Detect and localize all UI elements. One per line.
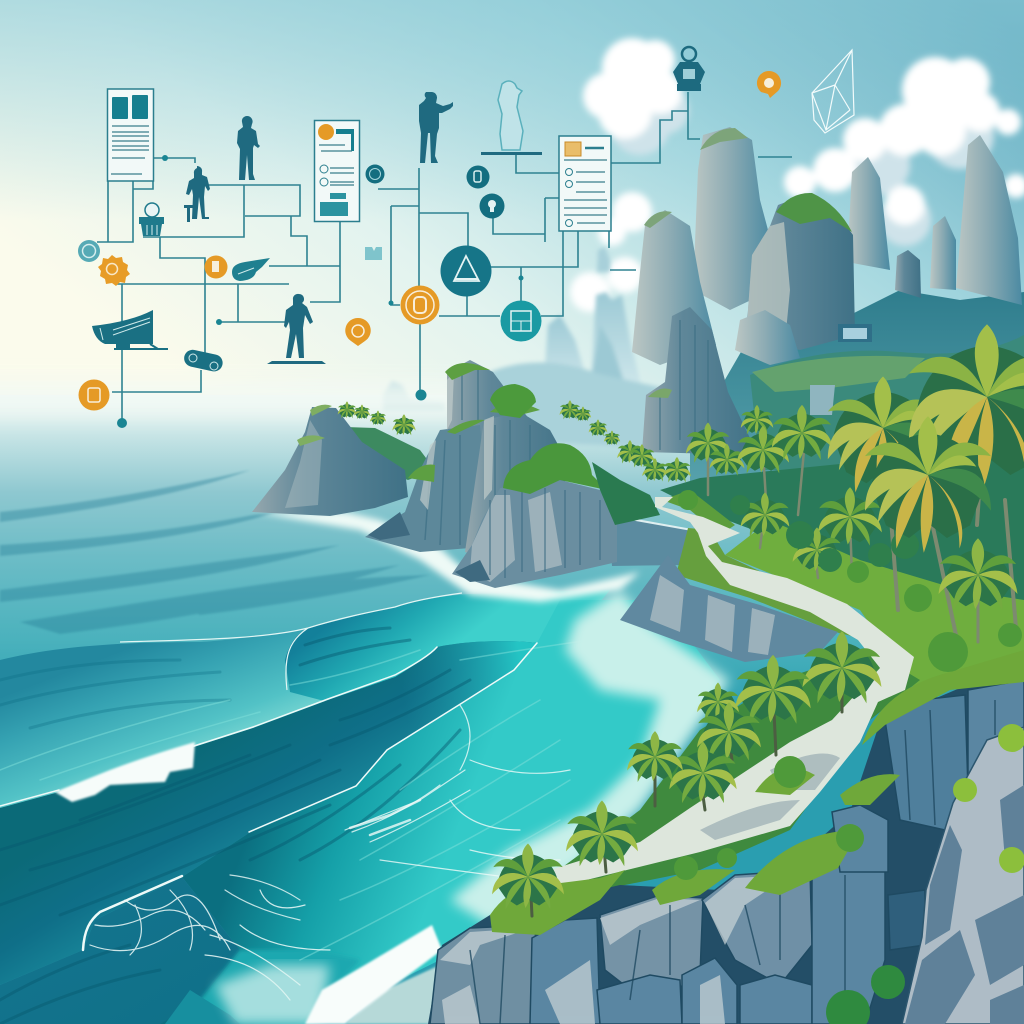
icon: robot [673, 47, 705, 91]
icon: teal controller [183, 348, 224, 373]
far left island rock [252, 407, 408, 516]
icon: bucket globe [139, 203, 164, 236]
rock tower: large green topped [745, 193, 855, 350]
main foam crest [55, 742, 195, 802]
far ledge moss [648, 389, 672, 398]
icon: triangle node [440, 246, 492, 296]
palm trunks [530, 400, 1016, 916]
rocky shoreline [620, 555, 838, 662]
icon: orange pin small [345, 318, 371, 346]
figure: man with stool [184, 166, 210, 222]
far left island face and caps [285, 420, 322, 508]
wave: bottom-left water [0, 877, 240, 1024]
sea wall top [608, 515, 692, 530]
sky top tint [0, 0, 1024, 220]
headland tree [490, 384, 536, 418]
icon: teal leaf shape [232, 258, 270, 281]
icon: dark teal ring [366, 164, 384, 184]
dark ripples upper [0, 660, 230, 728]
rocky shoreline faces [650, 575, 775, 655]
icon: open book [365, 247, 382, 260]
boulder cracks [470, 700, 995, 1024]
rock tower: tall central [693, 127, 772, 310]
wave: shore water [160, 600, 720, 1024]
grass lawn [725, 520, 1024, 690]
main path [550, 497, 914, 886]
sea wall [608, 515, 692, 566]
rock tower: front blue [642, 307, 758, 455]
foam lines [0, 643, 570, 1000]
central front rock strata [490, 488, 600, 578]
central headland back rock [447, 360, 570, 520]
cliff tufts [953, 724, 1024, 873]
foreground right cliff shadows [905, 785, 1024, 1024]
light ripples [0, 640, 590, 960]
grass strip by road [662, 490, 735, 535]
rock tower: far right spire [956, 135, 1022, 305]
central headland second rock [465, 412, 572, 560]
large palms right grove [828, 324, 1024, 610]
foreground right cliff [902, 727, 1024, 1024]
central headland canopy [503, 443, 607, 494]
figure: man pointing [419, 92, 453, 163]
rock tower: small right spire [930, 216, 956, 290]
mountain greenery [776, 193, 852, 232]
bay sand water [345, 965, 440, 1024]
icon: dark badge one [466, 166, 490, 188]
headland strata [425, 368, 530, 545]
icon: orange concentric node [400, 286, 440, 324]
shrubs [674, 490, 1022, 880]
icon: orange pin right [757, 71, 781, 98]
bottom foam band [305, 925, 442, 1024]
canopy shadow [592, 462, 660, 525]
document 3 [559, 136, 611, 231]
shallow foam near shore [450, 590, 730, 925]
right hazy small rock [810, 385, 835, 415]
wave: trough lit right [387, 641, 537, 750]
upper grove palms [560, 400, 882, 572]
background hills [690, 290, 1024, 500]
coastal lower green slope [545, 650, 920, 890]
low rock with hut [735, 310, 800, 365]
hut [838, 324, 872, 342]
wave: upper band [0, 628, 340, 815]
jungle slopes [750, 335, 1024, 470]
shoreline foam top [255, 512, 640, 602]
icon: crystal outline [812, 50, 854, 133]
figure: man on board [267, 294, 326, 364]
sea swell streaks [0, 470, 430, 634]
icon: orange badge small [204, 256, 228, 278]
cliff moss patches [490, 650, 1024, 935]
clouds [570, 38, 1024, 312]
wave: upper crest highlight [120, 593, 462, 690]
far left island: green shelves [345, 427, 435, 480]
bottom water [170, 950, 360, 1024]
grass verge [676, 528, 868, 640]
horizon haze [0, 382, 470, 416]
sky background [0, 0, 1024, 440]
wave: curl [285, 590, 610, 702]
far left island moss [297, 405, 332, 446]
jungle highlights [752, 356, 925, 392]
central front rock ridges [470, 492, 562, 582]
headland lit strip [420, 372, 494, 510]
network diagram connectors [97, 92, 792, 423]
central front rock [452, 480, 617, 588]
lower grove palms [492, 631, 881, 909]
road shadow [700, 754, 840, 840]
bottom bushes [826, 965, 905, 1024]
bushes mid grove [730, 495, 919, 572]
boulder highlights [440, 875, 790, 1024]
dark ripples [0, 628, 470, 1024]
right grove backdrop [660, 420, 1024, 620]
large tower lit face [748, 222, 790, 342]
small rocks at headland foot [368, 512, 490, 582]
distant pale peaks [383, 247, 700, 450]
sea base [0, 395, 1024, 1024]
bottom cliff back mass [428, 672, 1024, 1024]
rock tower: small green cap [895, 250, 921, 298]
rock tower: slim spire [847, 157, 890, 270]
headland moss [408, 363, 540, 482]
icon: dark badge two [480, 194, 504, 218]
document 2 [314, 120, 360, 222]
wave: main dark trough [0, 641, 537, 985]
document 1 [108, 89, 154, 181]
icon: light teal badge [78, 240, 100, 262]
hut window [843, 328, 867, 339]
cliff boulders [430, 680, 1024, 1024]
wave: bottom turquoise pool [165, 990, 240, 1024]
icon: orange sunburst [98, 255, 130, 286]
icon: teal window node [500, 300, 542, 342]
icon: orange badge bottom left [78, 380, 110, 410]
bottom foam haze [215, 965, 330, 1024]
rock tower: left [632, 210, 716, 365]
figure: man standing top [237, 116, 260, 180]
connector nodes [117, 155, 524, 428]
far left palms [338, 401, 416, 435]
icon: ship [92, 310, 168, 349]
front tower strata [660, 320, 708, 450]
central headland mid rock [365, 425, 484, 552]
figure: pale statue [481, 81, 542, 154]
tower caps [644, 128, 748, 228]
